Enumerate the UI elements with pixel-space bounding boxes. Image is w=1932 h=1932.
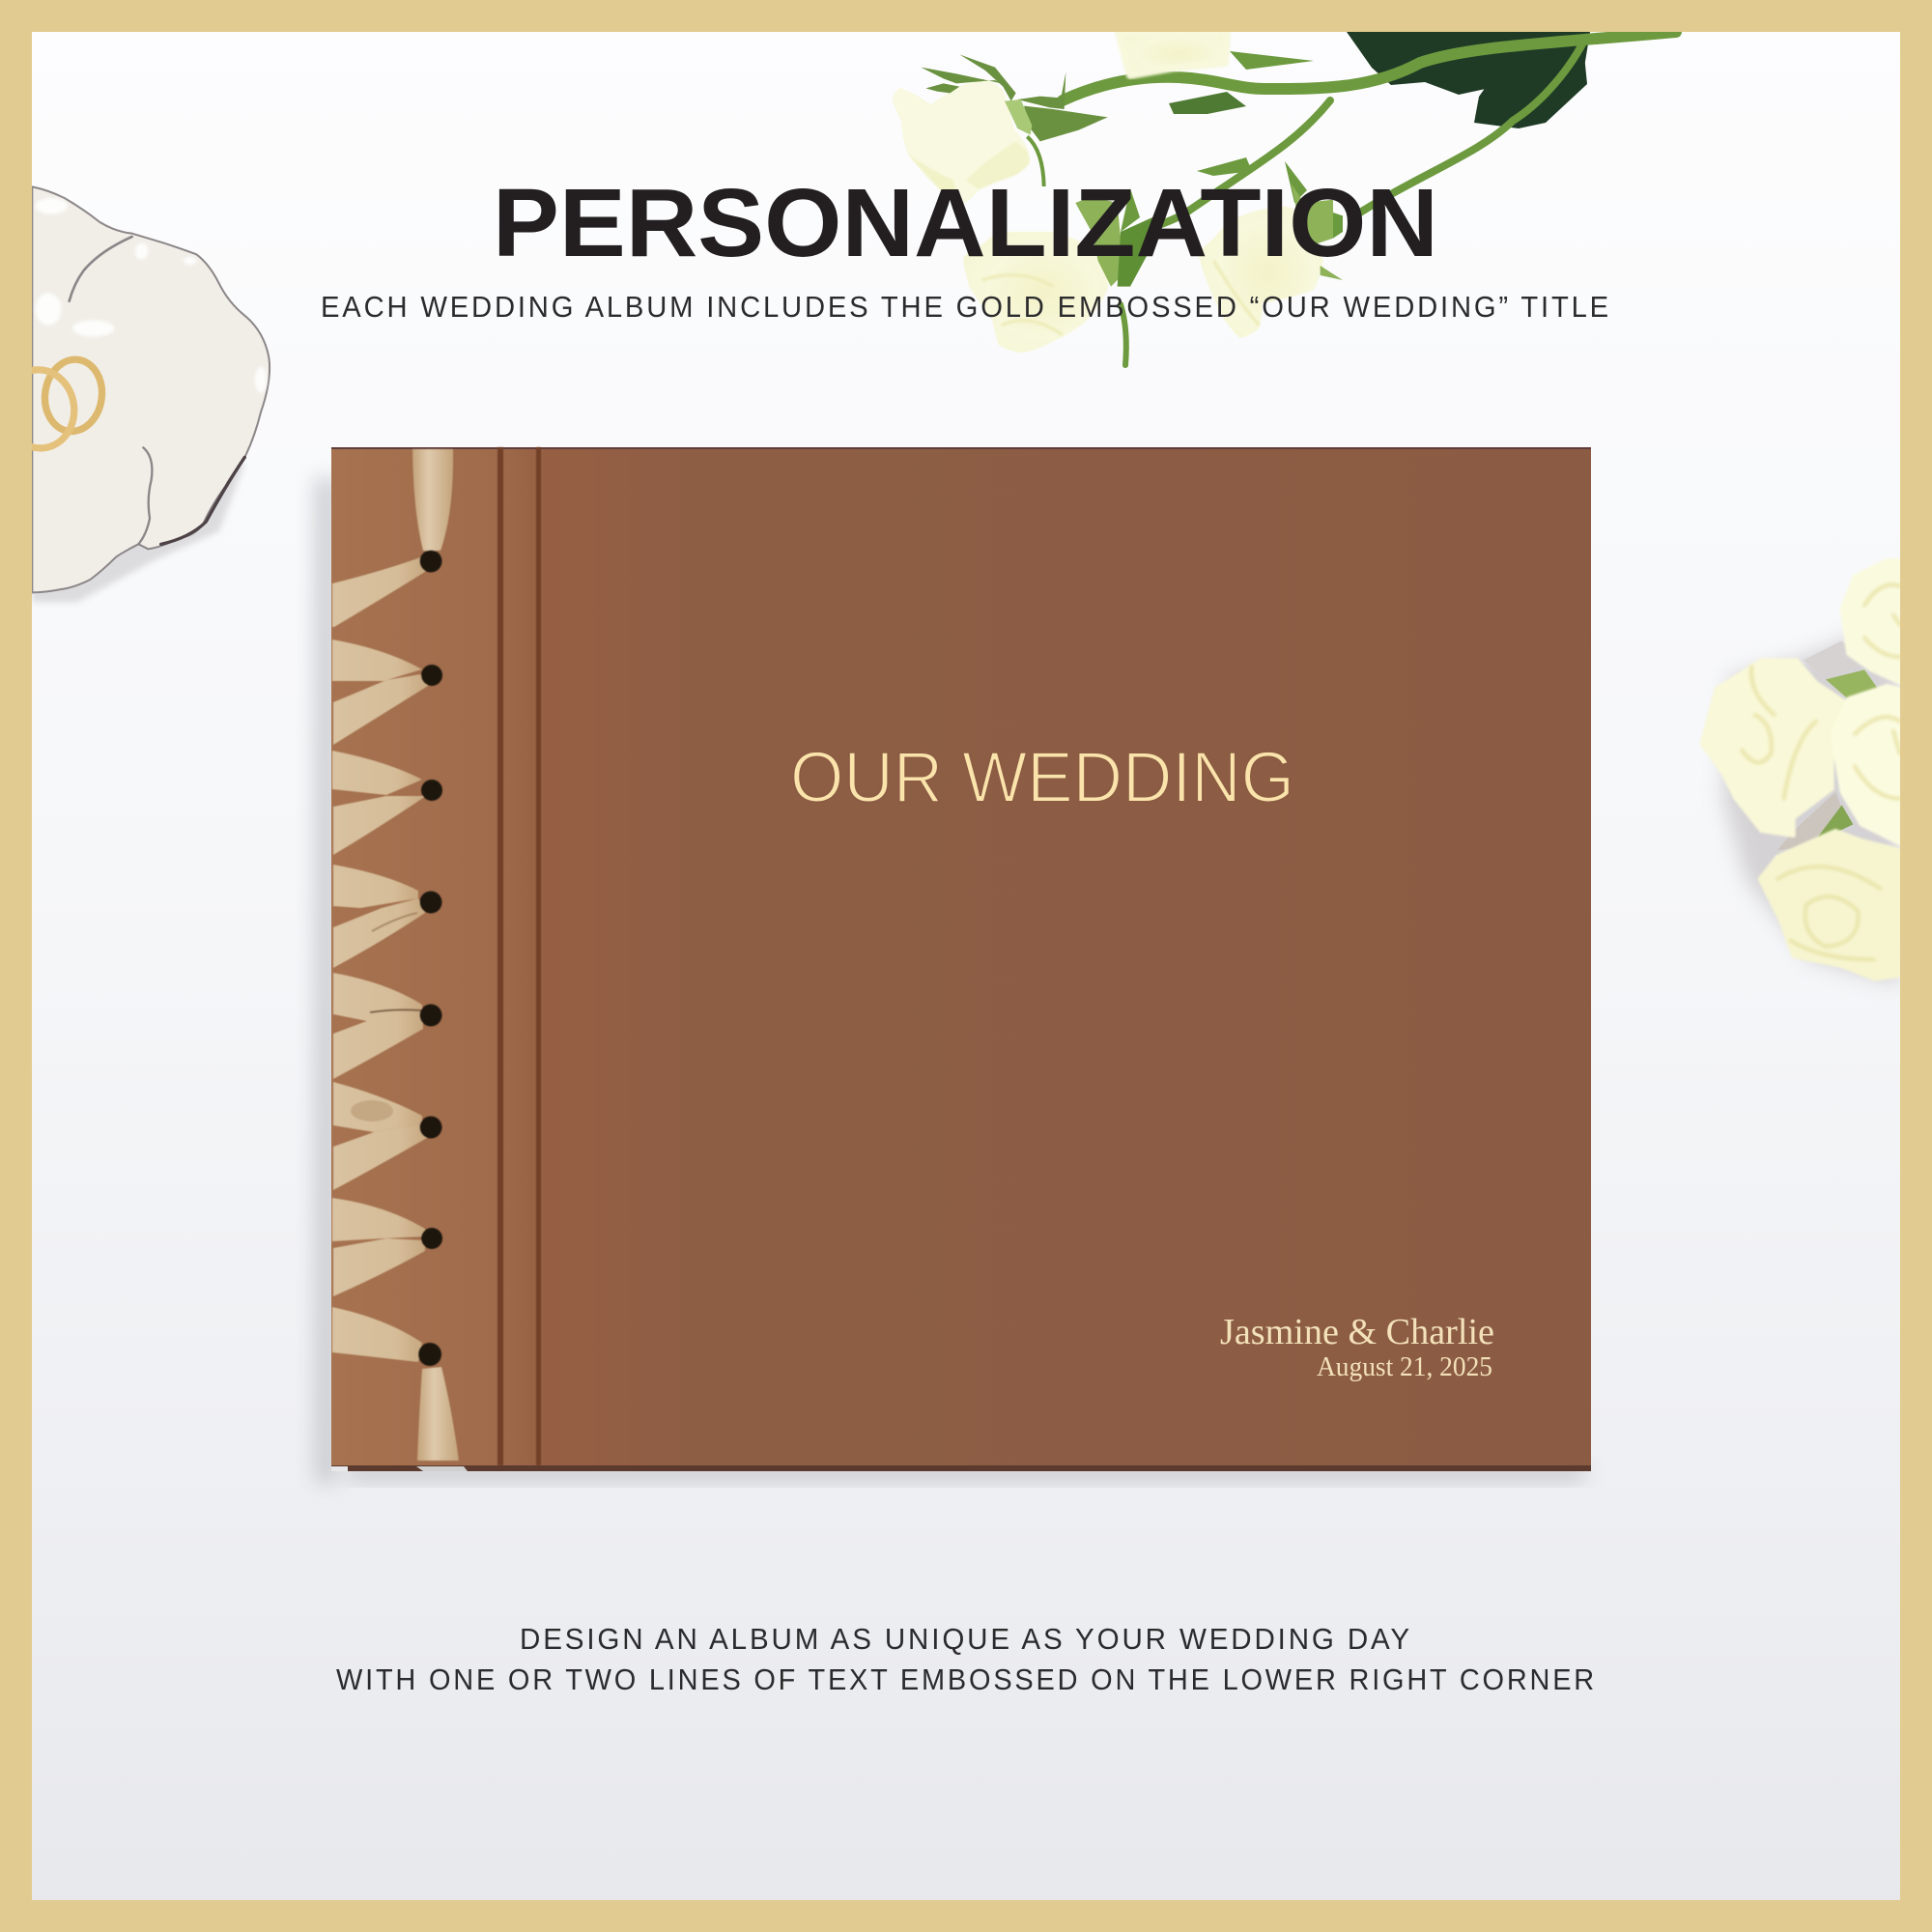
rose leaves [1826,669,1881,702]
ribbon stitch 3 [332,751,426,855]
bottom ribbon end [417,1367,459,1461]
dish inner petal edges [70,237,244,544]
top edge line [331,447,1591,449]
spine grooves [497,447,541,1465]
wedding rings [0,355,106,453]
photo: white rose branch [892,32,1676,365]
ribbon stitch 2 [332,639,428,745]
embossed date: August 21, 2025 [1317,1352,1492,1382]
ribbon stitch 5 [333,973,423,1079]
stems [1063,32,1676,365]
rose shadow [1722,638,1900,985]
gold foil title: OUR WEDDING: OUR WEDDING [790,737,1294,817]
top ribbon end [412,449,453,551]
ribbon lacing [332,449,459,1461]
subtitle: EACH WEDDING ALBUM INCLUDES THE GOLD EMBOSSED “OUR WEDDING” TITLE [321,290,1611,324]
small leaves at bud joints [1121,51,1314,232]
ribbon stitch 8 [332,1307,422,1362]
caption line 2: WITH ONE OR TWO LINES OF TEXT EMBOSSED ON THE LOWER RIGHT CORNER [336,1662,1597,1696]
bottom page edge [331,1465,1591,1471]
cover surface [331,447,1591,1471]
album cover [331,447,1591,1471]
ribbon stitch 1 [332,556,425,627]
punched holes [418,551,442,1366]
album book shadow [315,478,1584,1483]
dark leaves [1347,32,1590,128]
embossed names: Jasmine & Charlie [1220,1312,1494,1352]
photo: ceramic ring dish [0,186,270,602]
photo: cream roses at right [1702,560,1900,985]
bottom caption [336,1622,1597,1696]
dish highlights [36,198,267,393]
ribbon stitch 4 [333,865,425,968]
rose buds 3 and 4 with green hearts [963,184,1343,353]
rose bud 2 top [1119,32,1227,75]
rose petal folds [1742,584,1900,959]
caption line 1: DESIGN AN ALBUM AS UNIQUE AS YOUR WEDDING DAY [520,1622,1412,1656]
dish body [32,186,270,592]
rose blooms [1702,560,1900,979]
ribbon stitch 7 [332,1198,425,1296]
sepals [921,54,1108,141]
rose bud 1 with sepals [892,54,1108,206]
title: PERSONALIZATION [493,169,1438,277]
ribbon stitch 6 [333,1082,427,1190]
